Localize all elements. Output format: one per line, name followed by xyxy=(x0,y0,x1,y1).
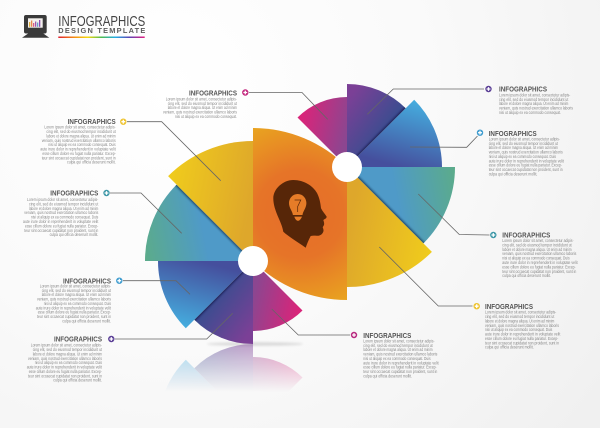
body: esse cillum dolore eu fugiat nulla pariatur. Excep- xyxy=(38,310,112,315)
heading: INFOGRAPHICS xyxy=(63,276,111,285)
heading: INFOGRAPHICS xyxy=(54,334,102,343)
body: nisi ut aliquip ex ea commodo consequat. Duis xyxy=(31,215,98,220)
body: Lorem ipsum dolor sit amet, consectetur adipis- xyxy=(166,96,238,101)
dot: blue left xyxy=(116,278,123,284)
dot: pink xyxy=(242,89,248,96)
dot: blue right xyxy=(477,130,483,136)
body: nisi ut aliquip ex ea commodo consequat. xyxy=(499,110,561,115)
text block: bottom centre xyxy=(363,331,439,378)
body xyxy=(27,343,103,383)
body: teur sint occaecat cupidatat non proident, sunt in xyxy=(24,228,99,233)
reflection of lower slices xyxy=(167,344,302,388)
body: teur sint occaecat cupidatat non proident, sunt in xyxy=(42,155,116,160)
body: cing elit, sed do eiusmod tempor incididunt ut xyxy=(33,347,103,352)
dot: purple top right xyxy=(485,86,492,92)
dot: teal left xyxy=(103,190,110,196)
slice: blue upper right xyxy=(358,100,442,167)
body: cing elit, sed do eiusmod tempor incididunt ut xyxy=(502,242,572,248)
body: teur sint occaecat cupidatat non proident, sunt in xyxy=(28,373,103,378)
body: veniam, quis nostrud exercitation ullamco laboris xyxy=(42,138,116,143)
body: aute irure dolor in reprehenderit in voluptate velit xyxy=(27,365,103,370)
dot: yellow right xyxy=(474,303,480,309)
body: nisi ut aliquip ex ea commodo consequat. Duis xyxy=(502,256,570,261)
text block: upper right xyxy=(489,129,565,176)
body: veniam, quis nostrud exercitation ullamco laboris xyxy=(502,251,576,256)
body: veniam, quis nostrud exercitation ullamco laboris xyxy=(24,210,98,215)
slice: purple upper right xyxy=(347,84,406,156)
body: labore et dolore magna aliqua. Ut enim ad minim xyxy=(489,145,558,150)
slice: magenta lower left xyxy=(253,272,302,331)
body: aute irure dolor in reprehenderit in voluptate velit xyxy=(489,158,565,163)
body: teur sint occaecat cupidatat non proident, sunt in xyxy=(489,167,563,172)
body: culpa qui officia deserunt mollit. xyxy=(363,373,412,378)
body: veniam, quis nostrud exercitation ullamco laboris xyxy=(163,110,237,114)
body xyxy=(40,125,116,165)
subtitle: DESIGN TEMPLATE xyxy=(58,26,145,35)
body: veniam, quis nostrud exercitation ullamco laboris xyxy=(363,352,437,356)
body: nisi ut aliquip ex ea commodo consequat. Duis xyxy=(48,142,116,147)
body xyxy=(363,338,439,378)
body: cing elit, sed do eiusmod tempor incididunt ut xyxy=(363,343,433,348)
heading: INFOGRAPHICS xyxy=(363,331,411,340)
body: culpa qui officia deserunt mollit. xyxy=(67,160,116,165)
body: labore et dolore magna aliqua. Ut enim ad minim xyxy=(485,318,555,324)
dot: purple left xyxy=(108,336,115,342)
body: veniam, quis nostrud exercitation ullamco laboris xyxy=(485,323,559,328)
body: labore et dolore magna aliqua. Ut enim ad minim xyxy=(46,134,116,138)
text block: lower left xyxy=(36,276,112,323)
body: labore et dolore magna aliqua. Ut enim ad minim xyxy=(33,352,102,356)
heading: INFOGRAPHICS xyxy=(189,89,237,98)
body: aute irure dolor in reprehenderit in voluptate velit xyxy=(36,305,112,310)
body: Lorem ipsum dolor sit amet, consectetur adipis- xyxy=(499,92,571,97)
slice: teal right xyxy=(358,167,455,244)
body: teur sint occaecat cupidatat non proident, sunt in xyxy=(37,314,112,319)
body: esse cillum dolore eu fugiat nulla pariatur. Excep- xyxy=(25,223,99,228)
body: nisi ut aliquip ex ea commodo consequat. Duis xyxy=(44,301,111,306)
body: veniam, quis nostrud exercitation ullamco laboris xyxy=(499,106,573,110)
text block: upper left xyxy=(40,117,116,165)
body: labore et dolore magna aliqua. Ut enim ad minim xyxy=(363,347,433,352)
body: cing elit, sed do eiusmod tempor incididunt ut xyxy=(42,288,112,293)
body: Lorem ipsum dolor sit amet, consectetur adipis- xyxy=(40,283,112,288)
body: esse cillum dolore eu fugiat nulla pariatur. Excep- xyxy=(29,369,103,374)
body: cing elit, sed do eiusmod tempor incididunt ut xyxy=(168,101,238,106)
body: esse cillum dolore eu fugiat nulla pariatur. Excep- xyxy=(42,151,116,156)
body: nisi ut aliquip ex ea commodo consequat. Duis xyxy=(489,154,556,159)
floor shadow xyxy=(207,342,303,346)
body: culpa qui officia deserunt mollit. xyxy=(50,232,98,237)
text block: bottom left xyxy=(27,334,103,383)
body: culpa qui officia deserunt mollit. xyxy=(53,378,102,383)
body: teur sint occaecat cupidatat non proident, sunt in xyxy=(502,269,577,274)
slice: magenta upper right xyxy=(298,97,347,156)
slice: yellow upper left xyxy=(168,141,253,250)
body: esse cillum dolore eu fugiat nulla pariatur. Excep- xyxy=(502,264,576,269)
body: nisi ut aliquip ex ea commodo consequat. Duis xyxy=(485,327,552,332)
body: cing elit, sed do eiusmod tempor incididunt ut xyxy=(485,314,555,319)
header logo and title xyxy=(22,13,145,38)
hub: lower left xyxy=(238,246,268,276)
slice: purple lower left xyxy=(194,272,253,344)
body: aute irure dolor in reprehenderit in voluptate velit xyxy=(363,360,439,365)
dot: yellow left xyxy=(120,118,127,125)
body: Lorem ipsum dolor sit amet, consectetur adipis- xyxy=(27,197,99,202)
body: labore et dolore magna aliqua. Ut enim ad minim xyxy=(499,101,569,106)
dot: teal right xyxy=(490,232,496,238)
heading: INFOGRAPHICS xyxy=(68,117,116,126)
text block: top right xyxy=(499,85,573,115)
text block: lower right xyxy=(485,302,561,350)
chart: segmented double-hub wheel xyxy=(143,80,457,346)
body: culpa qui officia deserunt mollit. xyxy=(502,273,551,278)
dot: magenta bottom xyxy=(351,332,357,338)
slice: teal left xyxy=(145,184,242,261)
body xyxy=(499,92,573,115)
body: aute irure dolor in reprehenderit in voluptate velit xyxy=(23,219,99,224)
heading: INFOGRAPHICS xyxy=(499,85,547,94)
body: culpa qui officia deserunt mollit. xyxy=(489,171,537,176)
slice: yellow lower right xyxy=(347,178,432,287)
slice: central orange xyxy=(253,128,347,300)
body: cing elit, sed do eiusmod tempor incididunt ut xyxy=(489,141,559,146)
body: aute irure dolor in reprehenderit in voluptate velit xyxy=(502,260,578,265)
body: Lorem ipsum dolor sit amet, consectetur adipis- xyxy=(44,125,116,130)
rainbow underline xyxy=(58,36,145,38)
heading: INFOGRAPHICS xyxy=(502,231,550,240)
body: cing elit, sed do eiusmod tempor incididunt ut xyxy=(46,129,116,134)
body: labore et dolore magna aliqua. Ut enim ad minim xyxy=(168,105,237,110)
slice: blue lower left xyxy=(158,261,242,328)
body: cing elit, sed do eiusmod tempor incididunt ut xyxy=(499,97,569,102)
body: labore et dolore magna aliqua. Ut enim ad minim xyxy=(502,247,572,252)
heading: INFOGRAPHICS xyxy=(485,302,533,311)
body: esse cillum dolore eu fugiat nulla pariatur. Excep- xyxy=(363,365,437,370)
body: nisi ut aliquip ex ea commodo consequat. xyxy=(175,114,237,119)
body: culpa qui officia deserunt mollit. xyxy=(485,345,534,350)
heading: INFOGRAPHICS xyxy=(489,129,537,138)
body: teur sint occaecat cupidatat non proident, sunt in xyxy=(363,369,438,374)
body: nisi ut aliquip ex ea commodo consequat. Duis xyxy=(363,356,431,361)
text block: top centre xyxy=(163,89,238,119)
body: Lorem ipsum dolor sit amet, consectetur adipis- xyxy=(485,310,557,315)
body: Lorem ipsum dolor sit amet, consectetur adipis- xyxy=(489,136,561,141)
body xyxy=(485,310,561,350)
body: culpa qui officia deserunt mollit. xyxy=(62,318,111,323)
body: veniam, quis nostrud exercitation ullamco laboris xyxy=(28,356,102,361)
marker dots xyxy=(103,86,497,342)
body: labore et dolore magna aliqua. Ut enim ad minim xyxy=(42,292,111,297)
icon: computer monitor with chart xyxy=(22,15,49,38)
heading: INFOGRAPHICS xyxy=(50,189,98,198)
text block: middle left xyxy=(23,189,99,237)
title: INFOGRAPHICS xyxy=(58,13,145,30)
body: labore et dolore magna aliqua. Ut enim ad minim xyxy=(29,206,99,211)
body xyxy=(502,238,578,278)
body xyxy=(23,197,99,237)
body xyxy=(163,96,238,119)
body: Lorem ipsum dolor sit amet, consectetur adipis- xyxy=(502,238,574,243)
leader lines xyxy=(110,89,490,339)
body xyxy=(36,283,112,323)
icon: head with light bulb xyxy=(273,180,327,248)
body: cing elit, sed do eiusmod tempor incididunt ut xyxy=(29,202,99,206)
body: Lorem ipsum dolor sit amet, consectetur adipis- xyxy=(363,338,435,343)
text block: middle right xyxy=(502,231,578,278)
body: teur sint occaecat cupidatat non proident, sunt in xyxy=(485,340,560,345)
hub: upper right xyxy=(332,152,362,182)
body: veniam, quis nostrud exercitation ullamco laboris xyxy=(489,150,563,154)
body: esse cillum dolore eu fugiat nulla pariatur. Excep- xyxy=(489,163,563,168)
body: Lorem ipsum dolor sit amet, consectetur adipis- xyxy=(31,343,103,348)
body: aute irure dolor in reprehenderit in voluptate velit xyxy=(40,147,116,152)
body xyxy=(489,136,565,176)
body: veniam, quis nostrud exercitation ullamco laboris xyxy=(37,296,111,302)
body: aute irure dolor in reprehenderit in voluptate velit xyxy=(485,332,561,337)
body: nisi ut aliquip ex ea commodo consequat. Duis xyxy=(35,360,102,365)
body: esse cillum dolore eu fugiat nulla pariatur. Excep- xyxy=(485,336,559,341)
